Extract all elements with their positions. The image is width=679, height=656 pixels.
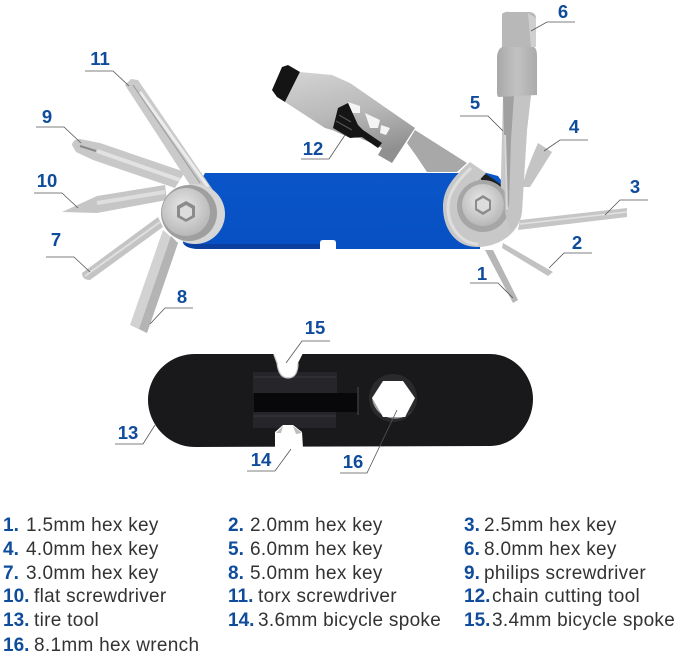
legend item 4: 4. <box>3 539 19 560</box>
legend item 11: 11. <box>228 586 253 607</box>
spoke notch 15 <box>273 353 303 378</box>
legend item 7: 7. <box>3 563 19 584</box>
label 7: 7 <box>51 229 61 250</box>
hex key 5 shaft <box>503 95 531 232</box>
legend item 8: 8. <box>228 563 244 584</box>
legend item 14: 14. <box>228 610 254 631</box>
right pivot housing <box>443 95 531 247</box>
label 8 <box>150 286 193 324</box>
hex key 4 <box>522 143 552 187</box>
legend item 14: 3.6mm bicycle spoke <box>258 610 441 631</box>
label 6: 6 <box>558 1 568 22</box>
hex key 7 <box>82 217 163 280</box>
label 11 <box>85 48 129 86</box>
label 2 <box>549 232 592 268</box>
label 16: 16 <box>343 451 363 472</box>
legend item 2: 2.0mm hex key <box>250 515 383 536</box>
label 1 <box>470 263 513 298</box>
label 9 <box>36 106 81 143</box>
label 9: 9 <box>42 106 52 127</box>
label 10: 10 <box>37 170 57 191</box>
label 5: 5 <box>470 92 480 113</box>
label 3 <box>605 176 648 215</box>
hex key 2 <box>502 243 553 276</box>
multi-tool assembly <box>62 12 627 333</box>
legend item 7: 3.0mm hex key <box>26 563 159 584</box>
legend item 10: flat screwdriver <box>34 586 167 607</box>
legend item 1: 1. <box>3 515 19 536</box>
label 7 <box>46 229 90 272</box>
legend item 5: 5. <box>228 539 244 560</box>
label 12: 12 <box>303 138 323 159</box>
label 12 <box>301 135 345 159</box>
label 1: 1 <box>477 263 487 284</box>
legend item 16: 8.1mm hex wrench <box>34 635 199 656</box>
legend item 16: 16. <box>3 635 29 656</box>
legend item 3: 3. <box>464 515 480 536</box>
label 16 <box>340 410 397 473</box>
body lower edge <box>184 244 320 249</box>
legend item 4: 4.0mm hex key <box>26 539 159 560</box>
hex wrench hole <box>369 374 417 422</box>
label 3: 3 <box>630 176 640 197</box>
legend item 8: 5.0mm hex key <box>250 563 383 584</box>
legend item 9: 9. <box>464 563 480 584</box>
legend item 12: chain cutting tool <box>492 586 640 607</box>
tyre groove lower rail <box>253 412 336 428</box>
flat screwdriver 10 <box>62 185 167 213</box>
label 13 <box>115 422 155 444</box>
hex key 1 <box>485 250 518 303</box>
label 11: 11 <box>90 48 110 69</box>
legend item 11: torx screwdriver <box>258 586 397 607</box>
label 4 <box>544 116 588 151</box>
8.0mm hex socket 6 <box>497 12 537 97</box>
label 15: 15 <box>305 317 325 338</box>
legend item 6: 8.0mm hex key <box>484 539 617 560</box>
tire tool plate <box>148 353 533 448</box>
left pivot bolt <box>161 184 225 244</box>
label 5 <box>460 92 503 131</box>
legend item 13: tire tool <box>34 610 99 631</box>
legend item 15: 3.4mm bicycle spoke <box>492 610 675 631</box>
label 14: 14 <box>251 449 272 470</box>
label 8: 8 <box>177 286 187 307</box>
legend <box>3 515 675 656</box>
spoke notch 14 <box>275 425 303 448</box>
legend item 10: 10. <box>3 586 29 607</box>
hex key 8 <box>130 230 178 333</box>
hex key 3 <box>518 208 627 230</box>
legend item 3: 2.5mm hex key <box>484 515 617 536</box>
tyre groove upper rail <box>253 372 337 393</box>
legend item 12: 12. <box>464 586 490 607</box>
legend item 1: 1.5mm hex key <box>26 515 159 536</box>
label 13: 13 <box>118 422 138 443</box>
label 4: 4 <box>569 116 580 137</box>
label 14 <box>247 449 291 471</box>
label 10 <box>34 170 78 208</box>
legend item 13: 13. <box>3 610 29 631</box>
tyre groove slot <box>254 387 358 415</box>
legend item 2: 2. <box>228 515 244 536</box>
label 6 <box>531 1 575 31</box>
label 15 <box>286 317 330 363</box>
philips screwdriver 9 <box>72 139 185 188</box>
legend item 6: 6. <box>464 539 480 560</box>
torx screwdriver 11 <box>125 79 213 190</box>
legend item 15: 15. <box>464 610 490 631</box>
blue tool body <box>182 173 480 249</box>
legend item 9: philips screwdriver <box>484 563 646 584</box>
label 2: 2 <box>572 232 582 253</box>
legend item 5: 6.0mm hex key <box>250 539 383 560</box>
chain cutting tool <box>272 65 467 172</box>
legend item 13 <box>3 610 99 631</box>
